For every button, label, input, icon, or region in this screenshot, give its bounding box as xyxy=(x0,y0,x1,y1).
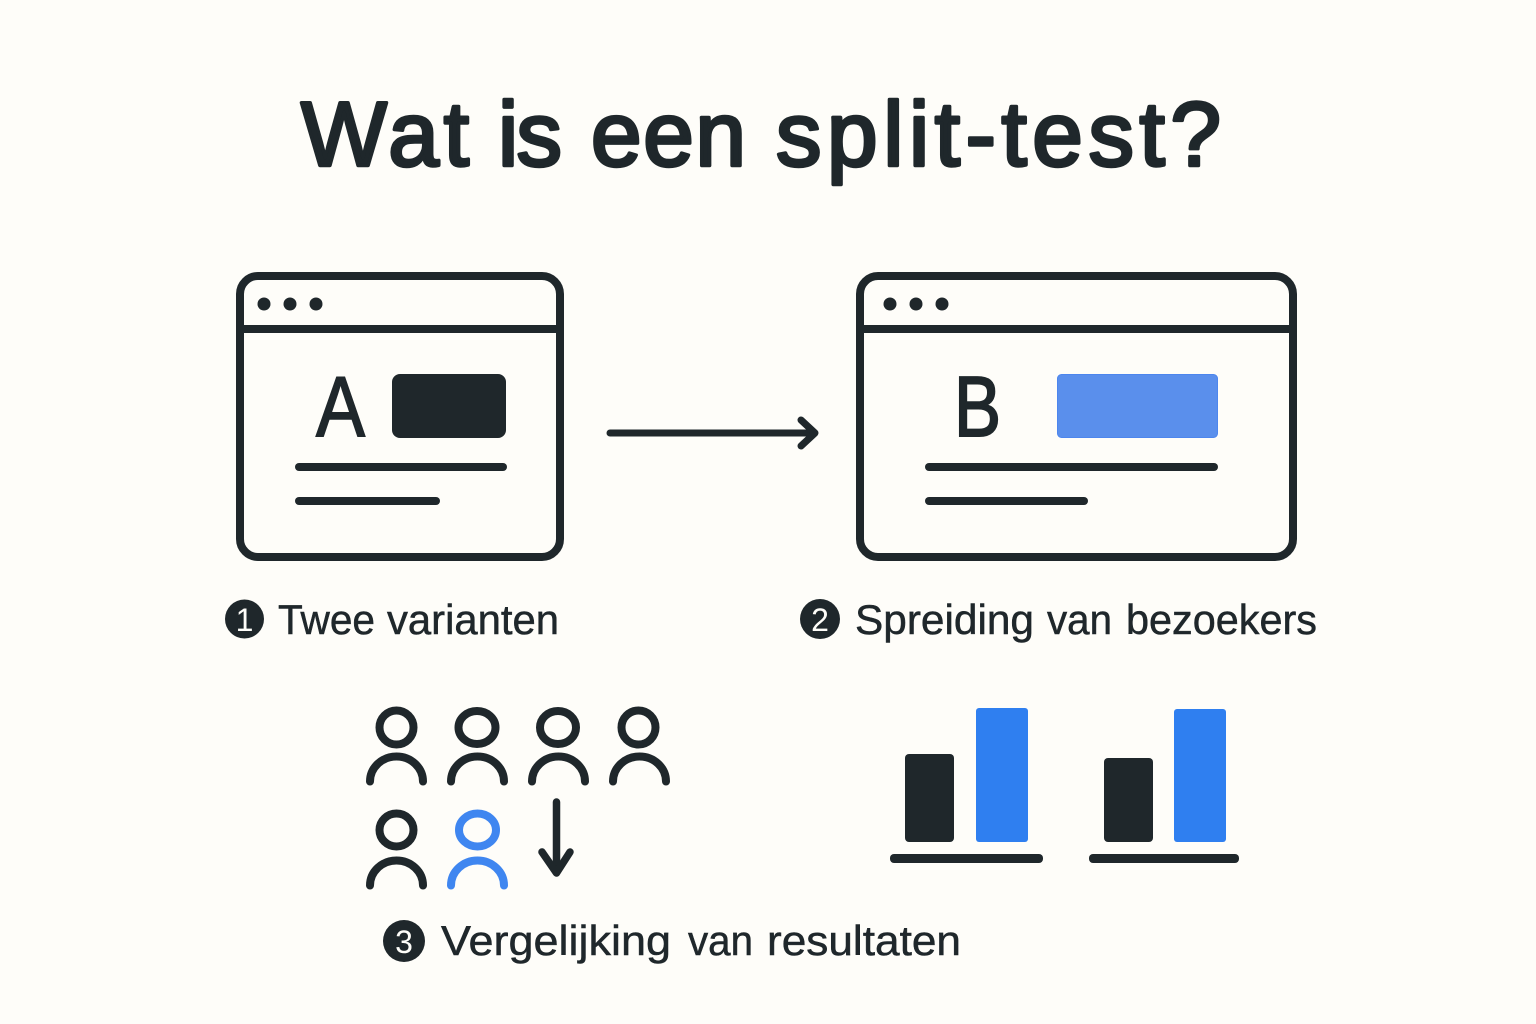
panel: variant A browser xyxy=(240,276,560,557)
bar chart 2 xyxy=(1089,709,1239,863)
label 3: Vergelijking xyxy=(441,917,671,964)
person 2 xyxy=(451,711,504,782)
person 6 blue xyxy=(451,814,504,886)
bar chart 1 xyxy=(890,708,1043,863)
label 2: 2 xyxy=(811,602,829,638)
person 5 xyxy=(370,814,423,886)
person 1 xyxy=(370,710,423,782)
label 1 xyxy=(225,596,559,643)
label 2: van xyxy=(1047,596,1112,643)
title: Wat xyxy=(301,84,469,186)
title: is xyxy=(498,84,562,186)
title: split-test? xyxy=(776,84,1221,186)
label 2: bezoekers xyxy=(1126,596,1317,643)
title: een xyxy=(591,84,746,186)
blue button xyxy=(1058,374,1218,438)
label 2 xyxy=(800,596,1317,643)
browser dots A xyxy=(258,298,322,310)
text lines A xyxy=(299,467,503,501)
arrow: A to B xyxy=(610,420,815,446)
letter A: A xyxy=(316,360,365,455)
label 1: Twee xyxy=(278,596,375,643)
label 2: Spreiding xyxy=(855,596,1034,643)
person 4 xyxy=(613,710,666,782)
label 3: van xyxy=(688,917,753,964)
text lines B xyxy=(929,467,1214,501)
label 1: varianten xyxy=(387,596,559,643)
label 3 xyxy=(383,917,961,964)
label 1: 1 xyxy=(236,602,253,638)
visitors group xyxy=(370,710,666,886)
browser dots B xyxy=(884,298,948,310)
panel: variant B browser xyxy=(860,276,1293,557)
dark button xyxy=(392,374,506,438)
person 3 xyxy=(532,711,585,782)
label 3: resultaten xyxy=(767,917,961,964)
arrow: down xyxy=(542,802,570,873)
letter B: B xyxy=(954,360,1001,455)
label 3: 3 xyxy=(395,924,413,960)
